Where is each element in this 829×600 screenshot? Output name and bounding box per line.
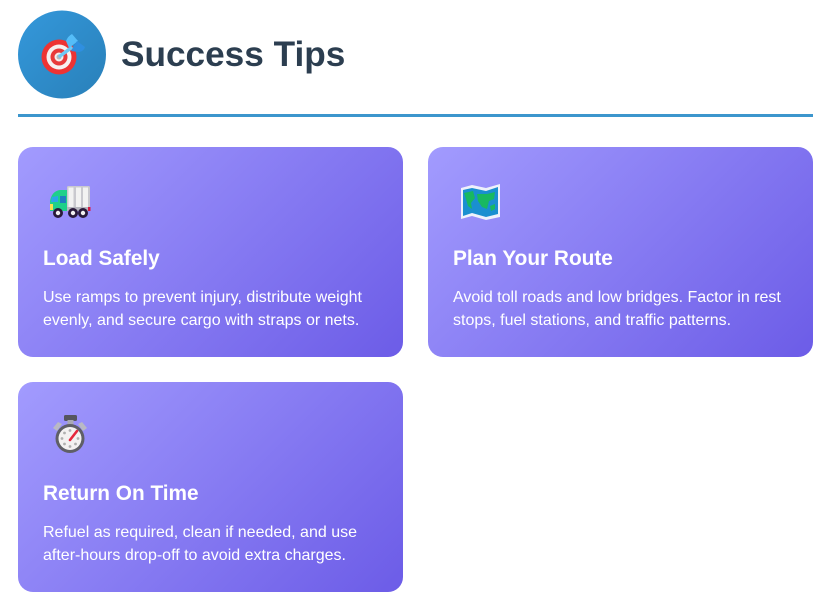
panel: load safely [18,147,403,357]
heading: Plan Your Route [453,247,613,270]
text block [43,289,362,329]
text block [43,524,357,564]
heading: Return On Time [43,482,199,505]
heading: Load Safely [43,247,160,270]
text block [453,289,781,329]
icon: truck [50,186,90,218]
text block: Refuel as required, clean if needed, and use [43,524,357,541]
panel: plan your route [428,147,813,357]
header icon: target with dart [18,10,106,98]
text block: stops, fuel stations, and traffic patterns. [453,312,731,329]
text block: Use ramps to prevent injury, distribute weight [43,289,362,306]
icon: stopwatch [53,415,87,453]
title: Success Tips [121,35,345,74]
text block: evenly, and secure cargo with straps or nets. [43,312,359,329]
icon: map [461,184,500,220]
text block: Avoid toll roads and low bridges. Factor in rest [453,289,781,306]
text block: after-hours drop-off to avoid extra charges. [43,547,346,564]
panel: return on time [18,382,403,592]
